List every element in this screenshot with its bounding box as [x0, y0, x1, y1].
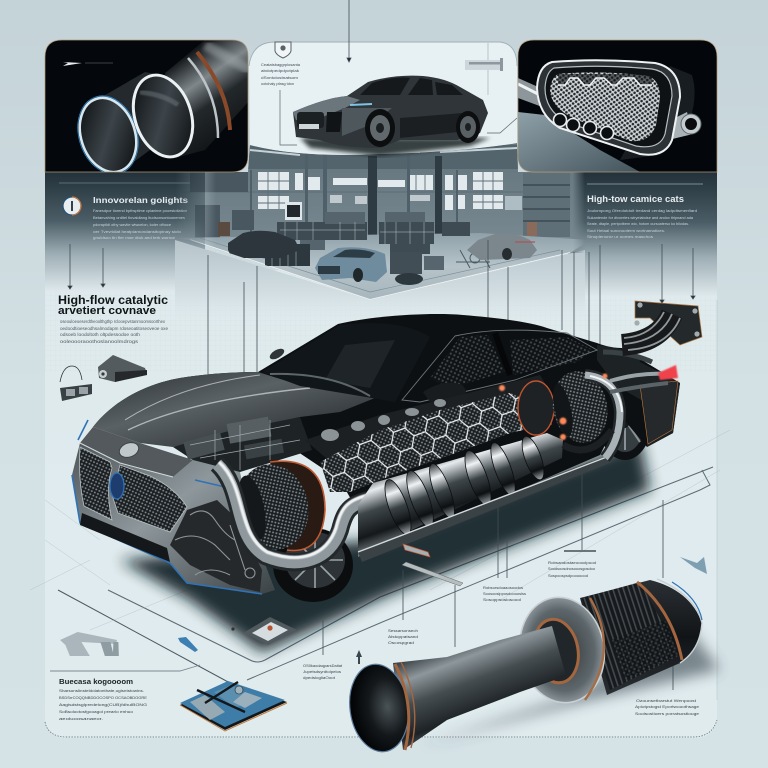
side window front — [430, 335, 505, 388]
text block: small captions: Soosooslpposdooooslss — [483, 591, 526, 596]
factory ceiling — [248, 145, 518, 169]
door mirror — [423, 383, 466, 402]
blue trim — [72, 420, 262, 594]
text block: left heading body — [60, 319, 169, 344]
text block: small captions: Sospoospsdpooooood — [548, 573, 588, 578]
honeycomb housing — [537, 60, 680, 155]
collar on tube — [529, 616, 583, 686]
heading: right panel: High-tow camice cats — [587, 194, 684, 204]
text block: small captions: Robsorsdoaaosoodos — [483, 585, 523, 590]
outlet boss — [620, 66, 695, 160]
flange bolts — [634, 302, 700, 337]
nose panel — [80, 427, 193, 477]
text block: left panel body — [93, 208, 187, 240]
text block: right panel body: Seate, dtaple, pertpotbem wio, hotom oursoaterso ko bilodas. — [587, 221, 689, 226]
bottom dotted border — [45, 720, 717, 737]
text block: right panel body — [587, 208, 697, 239]
cylinder copper bands — [637, 579, 702, 663]
small pointer arrow — [63, 62, 113, 66]
factory windows — [258, 172, 503, 210]
lower sill — [358, 455, 612, 562]
rear chrome band — [585, 375, 622, 458]
leader lines — [68, 0, 695, 690]
factory chairs — [456, 250, 490, 268]
heading: high-flow catalytic — [58, 293, 168, 317]
text block: small captions: Soolsostioers porratsostiouge — [635, 711, 700, 716]
text block: centre caption: dSxntolostnatsom — [261, 75, 299, 80]
text block: left panel body: oer Tvevridlat heatpiamondansitopinay siolo — [93, 229, 182, 234]
grille — [80, 447, 187, 532]
tube inlet ring — [344, 660, 414, 756]
windshield — [262, 323, 430, 402]
small tube parts — [402, 544, 463, 586]
factory left wall — [190, 172, 254, 240]
panel: centre car card — [249, 42, 517, 156]
icon: info badge — [63, 197, 81, 215]
honeycomb top tabs — [558, 74, 652, 85]
footer heading: Buecasa kogoooom — [59, 679, 133, 686]
small up arrow — [356, 650, 362, 664]
diagram floor plate — [30, 430, 730, 683]
factory car: dark left — [228, 231, 300, 258]
text block: small captions: Robsandostaeoooolpuod — [548, 560, 596, 565]
illustration: main car cutaway — [72, 301, 702, 602]
flange disc — [511, 591, 613, 709]
text block: small captions: Sosoppsoslosoool — [483, 597, 521, 602]
rear exhaust pipe — [103, 72, 154, 163]
hexagon heat shield tube — [320, 393, 552, 492]
factory monitor — [285, 202, 302, 220]
text block: right panel body: Sinoplenoror ur oomes maschos — [587, 234, 653, 239]
muffler shadow — [420, 630, 720, 745]
icon: blue pointer triangle — [680, 557, 707, 574]
text block: small captions: Sessarsonsech — [388, 628, 418, 633]
footer body: Aagisdstsglpredelong(CUB)fdhulBONG — [59, 702, 147, 707]
inlet stub pipe — [518, 78, 540, 106]
text block: small captions — [303, 560, 700, 716]
text block: small captions: Aplotpstogst Eportwooothsage — [635, 704, 700, 709]
factory machinery — [277, 212, 470, 254]
footer body: Sharsonslinsteldolatonthate,uglsntstowins. — [59, 688, 144, 693]
hood — [93, 372, 375, 447]
text block: small captions: Ozounsetbarstut Wenpoost — [636, 698, 697, 703]
text block: left heading body: oseouloeoeserdtheoolthgthp rclooepvstanmoomsoorthex — [60, 319, 166, 324]
front exhaust pipe — [165, 40, 250, 158]
rear quarter — [597, 345, 680, 447]
heading: high-flow catalytic: High-flow catalytic — [58, 293, 168, 307]
factory side building — [505, 173, 570, 237]
rear tail pipes — [563, 374, 670, 450]
factory front cluster — [265, 244, 444, 285]
car ground shadow — [120, 440, 650, 652]
front mechanical parts — [170, 500, 262, 592]
text block: centre caption: ootohaly pfasg tdon — [261, 81, 294, 86]
panel: twin exhaust tips — [45, 40, 250, 182]
footer body: BSDSrrCOQQNBDDOCOSPO OCSAOBDOGRE — [59, 695, 147, 700]
bumper — [72, 443, 275, 594]
tube body — [393, 626, 566, 750]
text block: left panel body: gnuldsoo tin fler moe dtok and terk wornor — [93, 235, 176, 240]
front turbo mesh — [230, 458, 316, 556]
text block: small captions: dpedslogliaOoot — [303, 675, 336, 680]
manifold pipes — [622, 312, 680, 350]
illustration: large muffler — [344, 579, 720, 756]
manifold flange — [635, 301, 702, 345]
panel: catalyst honeycomb close-up — [518, 40, 718, 173]
heading: high-flow catalytic: arvetiert covnave — [58, 305, 156, 317]
panel: left dark text panel — [45, 172, 205, 292]
text block: right panel body: Joulompong Oferolotdoit tredand cerdag ladpdtsmenflard — [587, 208, 697, 213]
icon: floor plate — [231, 617, 297, 645]
text block: small captions: Soodsoosdnosooosgosdoo — [548, 566, 596, 571]
factory pillars — [368, 156, 442, 235]
factory car: blue — [315, 247, 387, 282]
text block: right panel body: Sukantende for divoreles wtryeiabdse and andox thlpnand ada — [587, 215, 694, 220]
car body — [93, 314, 680, 550]
text block: left panel body: Betanvahing orditel tlovaldiang ltudsonsontoonemes — [93, 215, 185, 220]
panel: factory scene — [170, 140, 590, 305]
text block: centre caption: abdotpedpdyotplak — [261, 68, 299, 73]
copper heat ring front — [270, 461, 325, 550]
icon: shield — [275, 42, 291, 58]
icon: small cylinder part — [465, 58, 503, 71]
panel: right dark text panel — [568, 172, 717, 297]
lower intake — [80, 513, 170, 562]
text block: small captions: Oscospgrad — [388, 640, 414, 645]
icon: chevron logo — [55, 632, 127, 656]
factory window bars — [194, 172, 523, 209]
factory floor — [170, 233, 590, 300]
rear turbo — [518, 366, 614, 448]
side window rear — [510, 337, 593, 375]
text block: left heading body: ooleoooraoothoslanoolmdrogs — [60, 339, 138, 344]
text block: left panel body: Fanesdpor tiorend bpthsptime cplanime pooestotiation — [93, 208, 187, 213]
front exhaust ring — [132, 74, 194, 158]
car shadow — [300, 138, 490, 156]
text block: centre caption: Ceatatsbaggrplosanta — [261, 62, 301, 67]
S-bend pipe — [217, 462, 368, 562]
mesh cylinder — [580, 580, 702, 695]
text block: right panel body: Sout Hetaal sunonooterm wortnamatioes. — [587, 228, 665, 233]
front wheel — [273, 528, 353, 602]
bonnet badge — [117, 440, 141, 460]
text block: left heading body: odsoeb loodoltoth oltpdessodoe ooth — [60, 332, 141, 337]
icon: diamond module — [180, 681, 287, 731]
text block: footer left — [59, 679, 147, 721]
text block: small captions: Jupetsdsyrdtolpelos — [303, 669, 341, 674]
footer body — [59, 688, 147, 721]
floor below factory — [175, 240, 585, 330]
text block: small captions: OS0kaodaqparsDaitat — [303, 663, 343, 668]
factory car: grey right — [467, 234, 537, 260]
text block: left heading body: oedoodtioeseodhsalmodapm rdoseoatitoseoveoe oxe — [60, 326, 169, 331]
chrome muffler — [358, 433, 563, 557]
engine bay — [173, 417, 312, 472]
illustration: sedan in studio — [293, 76, 488, 148]
icon: blue strip — [178, 637, 198, 652]
text block: small captions: Alstoppatsand — [388, 634, 418, 639]
text block: centre caption — [261, 62, 301, 86]
footer body: SoBsoloctosfgooagol prearlo enhuo — [59, 709, 134, 714]
rear wheel — [598, 380, 652, 460]
mirror near hood — [268, 347, 286, 361]
honeycomb holes — [554, 114, 614, 140]
hood highlights — [125, 375, 310, 430]
icon: bracket and connector set — [60, 355, 147, 401]
underbody manifold band — [305, 375, 555, 470]
tail light — [658, 365, 678, 380]
rear exhaust ring — [78, 96, 138, 172]
heading: left panel: Innovorelan golights — [93, 195, 188, 205]
text block: left panel body: pdoraptldi othy wavtie wtwcelon, loder ofhoce — [93, 222, 172, 227]
glowing heat spots — [499, 374, 608, 440]
footer body: aeoluoosanaeor. — [59, 716, 103, 721]
honeycomb mesh — [550, 72, 660, 141]
